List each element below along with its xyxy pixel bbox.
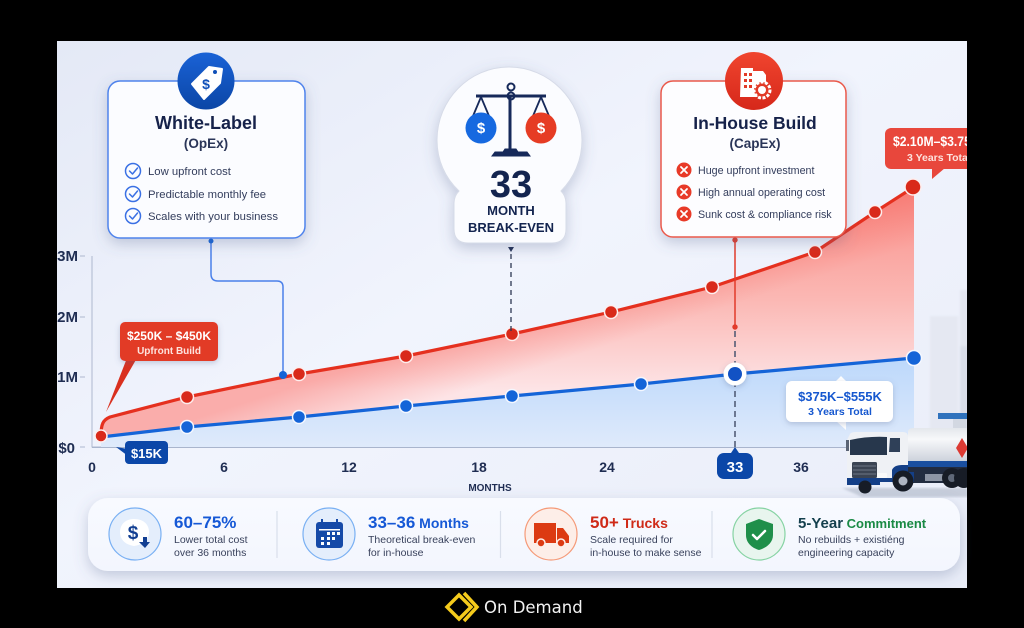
wheels bbox=[858, 480, 872, 494]
callout: white-label 3-year total: $375K–$555K bbox=[798, 389, 883, 404]
ground shadow bbox=[842, 488, 968, 497]
blue cost area bbox=[101, 358, 914, 447]
stat: break-even months: 33–36 Months bbox=[368, 513, 469, 532]
badge: break-even: BREAK-EVEN bbox=[468, 220, 554, 235]
x axis labels bbox=[88, 462, 808, 472]
month 33 badge bbox=[717, 447, 753, 479]
benefit list: Predictable monthly fee bbox=[148, 189, 266, 201]
y axis line bbox=[80, 256, 101, 448]
stat: commitment bbox=[733, 508, 927, 560]
risk list: High annual operating cost bbox=[698, 187, 825, 199]
icon: balance scale: $ bbox=[537, 120, 546, 137]
x axis labels: 12 bbox=[341, 459, 357, 475]
depot canopy bbox=[938, 413, 968, 419]
stat: trucks: in-house to make sense bbox=[590, 547, 702, 559]
callout: 15K bbox=[116, 441, 168, 464]
callout: upfront build: $250K – $450K bbox=[127, 329, 211, 343]
red data points bbox=[95, 179, 921, 442]
stat: lower cost bbox=[109, 508, 248, 560]
y axis labels: $3M bbox=[49, 248, 78, 265]
red area line glow bbox=[101, 187, 914, 447]
x axis labels: 0 bbox=[88, 459, 96, 475]
stat: lower cost: Lower total cost bbox=[174, 534, 248, 546]
card: in-house build bbox=[661, 52, 846, 237]
red cost area bbox=[101, 187, 914, 447]
grille bbox=[852, 462, 877, 478]
icon: building and gear bbox=[725, 52, 783, 110]
headlight bbox=[877, 473, 887, 478]
y axis labels: $2M bbox=[49, 309, 78, 326]
y axis labels: $0 bbox=[58, 440, 75, 457]
stat: trucks bbox=[525, 508, 702, 560]
badge: break-even bbox=[437, 67, 582, 243]
subheading: (OpEx) bbox=[184, 136, 228, 151]
summary bar bbox=[88, 498, 960, 571]
icon: balance scale bbox=[466, 84, 556, 156]
card: white-label bbox=[108, 52, 305, 238]
blue cost line bbox=[101, 358, 914, 437]
benefit list bbox=[126, 164, 278, 224]
connector: in-house card to month 33 bbox=[732, 237, 738, 455]
icon: yellow diamonds bbox=[447, 593, 477, 621]
callout: in-house 3-year total bbox=[885, 128, 967, 179]
risk list bbox=[676, 162, 832, 222]
stat: break-even months: for in-house bbox=[368, 547, 424, 559]
chassis bbox=[908, 467, 967, 483]
tank bbox=[908, 428, 967, 461]
benefit list: Low upfront cost bbox=[148, 166, 232, 178]
stat: break-even months: Theoretical break-even bbox=[368, 534, 476, 546]
callout: 15K: $15K bbox=[131, 446, 163, 461]
bumper and fender bbox=[847, 478, 880, 485]
icon: price tag: $ bbox=[202, 76, 210, 92]
x axis labels: 36 bbox=[793, 459, 809, 475]
callout: in-house 3-year total: $2.10M–$3.75M bbox=[893, 134, 981, 149]
callout: upfront build bbox=[106, 322, 218, 412]
stat: commitment: engineering capacity bbox=[798, 547, 895, 559]
baseline bbox=[92, 448, 846, 449]
connector: break-even marker bbox=[508, 247, 514, 332]
risk list: Huge upfront investment bbox=[698, 165, 814, 177]
footer brand: On Demand bbox=[484, 598, 583, 617]
y axis labels: $1M bbox=[49, 369, 78, 386]
stat: break-even months bbox=[303, 508, 476, 560]
callout: in-house 3-year total: 3 Years Total bbox=[907, 152, 971, 164]
icon: tanker truck bbox=[842, 413, 974, 497]
x axis labels: 18 bbox=[471, 459, 487, 475]
subheading: (CapEx) bbox=[729, 136, 781, 151]
heading: White-Label bbox=[155, 113, 257, 133]
chart bbox=[49, 179, 922, 494]
icon: balance scale: $ bbox=[477, 120, 486, 137]
month 33 marker bbox=[724, 362, 746, 386]
footer brand bbox=[447, 593, 583, 621]
break-even figure: 33 bbox=[490, 164, 532, 206]
stat: commitment: No rebuilds + existiéng bbox=[798, 534, 905, 546]
callout: upfront build: Upfront Build bbox=[137, 346, 201, 357]
connector: white-label card to chart bbox=[208, 238, 287, 379]
stat: lower cost: 60–75% bbox=[174, 513, 236, 532]
risk list: Sunk cost & compliance risk bbox=[698, 209, 832, 221]
stat: lower cost: $ bbox=[128, 523, 139, 544]
month 33 badge: 33 bbox=[727, 459, 743, 476]
callout: white-label 3-year total: 3 Years Total bbox=[808, 406, 872, 418]
stat: trucks: 50+ Trucks bbox=[590, 513, 668, 532]
break-even label: MONTH bbox=[487, 203, 535, 218]
callout: white-label 3-year total bbox=[786, 376, 893, 430]
stat: commitment: 5-Year Commitment bbox=[798, 515, 927, 532]
x axis labels: 24 bbox=[599, 459, 615, 475]
background city and depot bbox=[930, 290, 968, 430]
x axis labels: 6 bbox=[220, 459, 228, 475]
red cost line bbox=[101, 187, 914, 436]
icon: price tag bbox=[178, 52, 234, 110]
background panel bbox=[57, 41, 967, 588]
x axis title: MONTHS bbox=[468, 483, 512, 494]
stat: lower cost: over 36 months bbox=[174, 547, 246, 559]
benefit list: Scales with your business bbox=[148, 211, 278, 223]
blue data points bbox=[180, 350, 922, 434]
heading: In-House Build bbox=[693, 113, 817, 133]
cab bbox=[847, 432, 908, 465]
y axis labels bbox=[58, 251, 77, 454]
stat: trucks: Scale required for bbox=[590, 534, 673, 546]
